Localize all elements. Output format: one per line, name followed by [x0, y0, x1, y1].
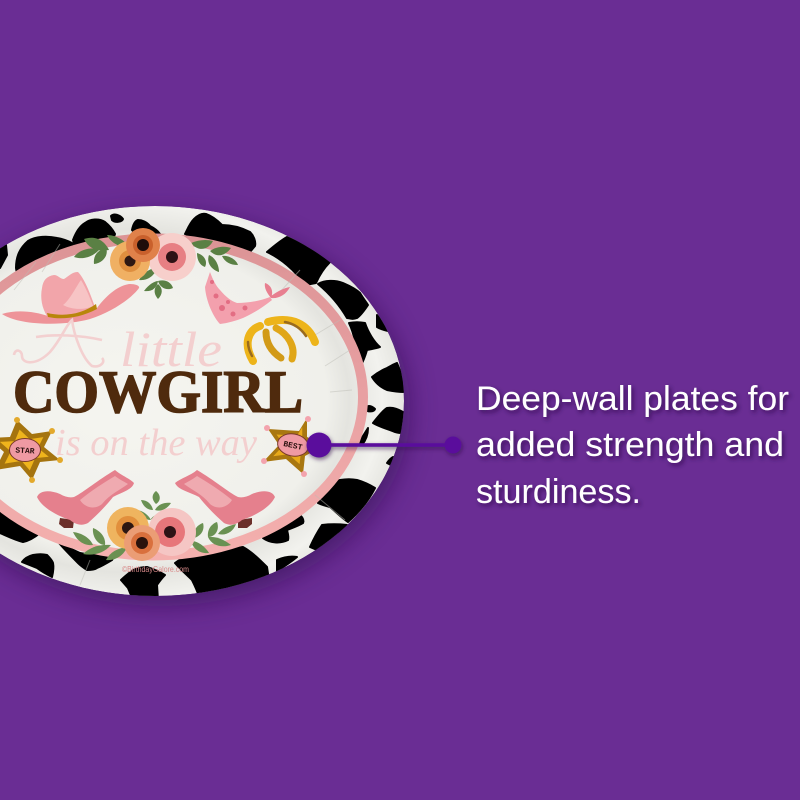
cowboy hat [2, 272, 139, 324]
connector end dot [444, 436, 462, 454]
leaves: bottom right [191, 522, 236, 553]
connector start dot [306, 432, 332, 458]
flower: pink rose [148, 508, 196, 556]
bandana [205, 272, 290, 324]
leaves: under top flowers [139, 267, 173, 299]
callout text: Deep-wall plates for [476, 380, 789, 418]
horseshoes [248, 320, 315, 361]
star label: STAR [15, 447, 35, 457]
right boot [175, 470, 275, 528]
leaves: bottom left [73, 528, 127, 560]
right boot upper highlight [184, 476, 232, 507]
leaves: above bottom flowers [137, 491, 171, 521]
bandana paisley [210, 280, 248, 316]
left boot heel [59, 518, 74, 528]
bandana body [205, 272, 272, 324]
plate base [0, 206, 404, 596]
connector line [319, 443, 454, 447]
callout text [476, 380, 789, 511]
star label: BEST [282, 440, 303, 453]
callout connector [306, 432, 462, 458]
callout text: sturdiness. [476, 473, 641, 511]
COWGIRL heading: COWGIRL [13, 359, 303, 425]
flower: orange [126, 228, 160, 262]
left boot upper highlight [80, 476, 128, 507]
radial wall creases [14, 244, 352, 585]
leaves: top right [191, 240, 238, 272]
pink rim band [0, 238, 363, 556]
hat brim [2, 284, 139, 324]
left boot [37, 470, 134, 528]
flower: peach [110, 241, 150, 281]
copyright mark: ©BirthdayGalore.com [122, 564, 189, 574]
hat crown [41, 272, 97, 318]
plate [0, 206, 404, 600]
right boot heel [238, 518, 252, 528]
hat band [47, 304, 97, 318]
top flowers [74, 228, 238, 299]
flower: pink rose [148, 233, 196, 281]
flower: orange [124, 525, 160, 561]
sheriff star: left [0, 417, 63, 483]
callout text: added strength and [476, 426, 784, 464]
bandana knot tails [265, 283, 290, 298]
cow-print patches [0, 214, 404, 600]
flower: peach [107, 507, 149, 549]
script line: A little [14, 320, 222, 377]
sheriff star: right [261, 416, 325, 477]
plate shadow [0, 214, 410, 606]
script line: is on the way: is on the way [55, 422, 257, 464]
script word: little [120, 321, 222, 377]
hat crown highlight [63, 280, 93, 309]
bottom flowers [73, 491, 236, 561]
script flourish [14, 320, 103, 366]
leaves: top left [74, 235, 129, 264]
